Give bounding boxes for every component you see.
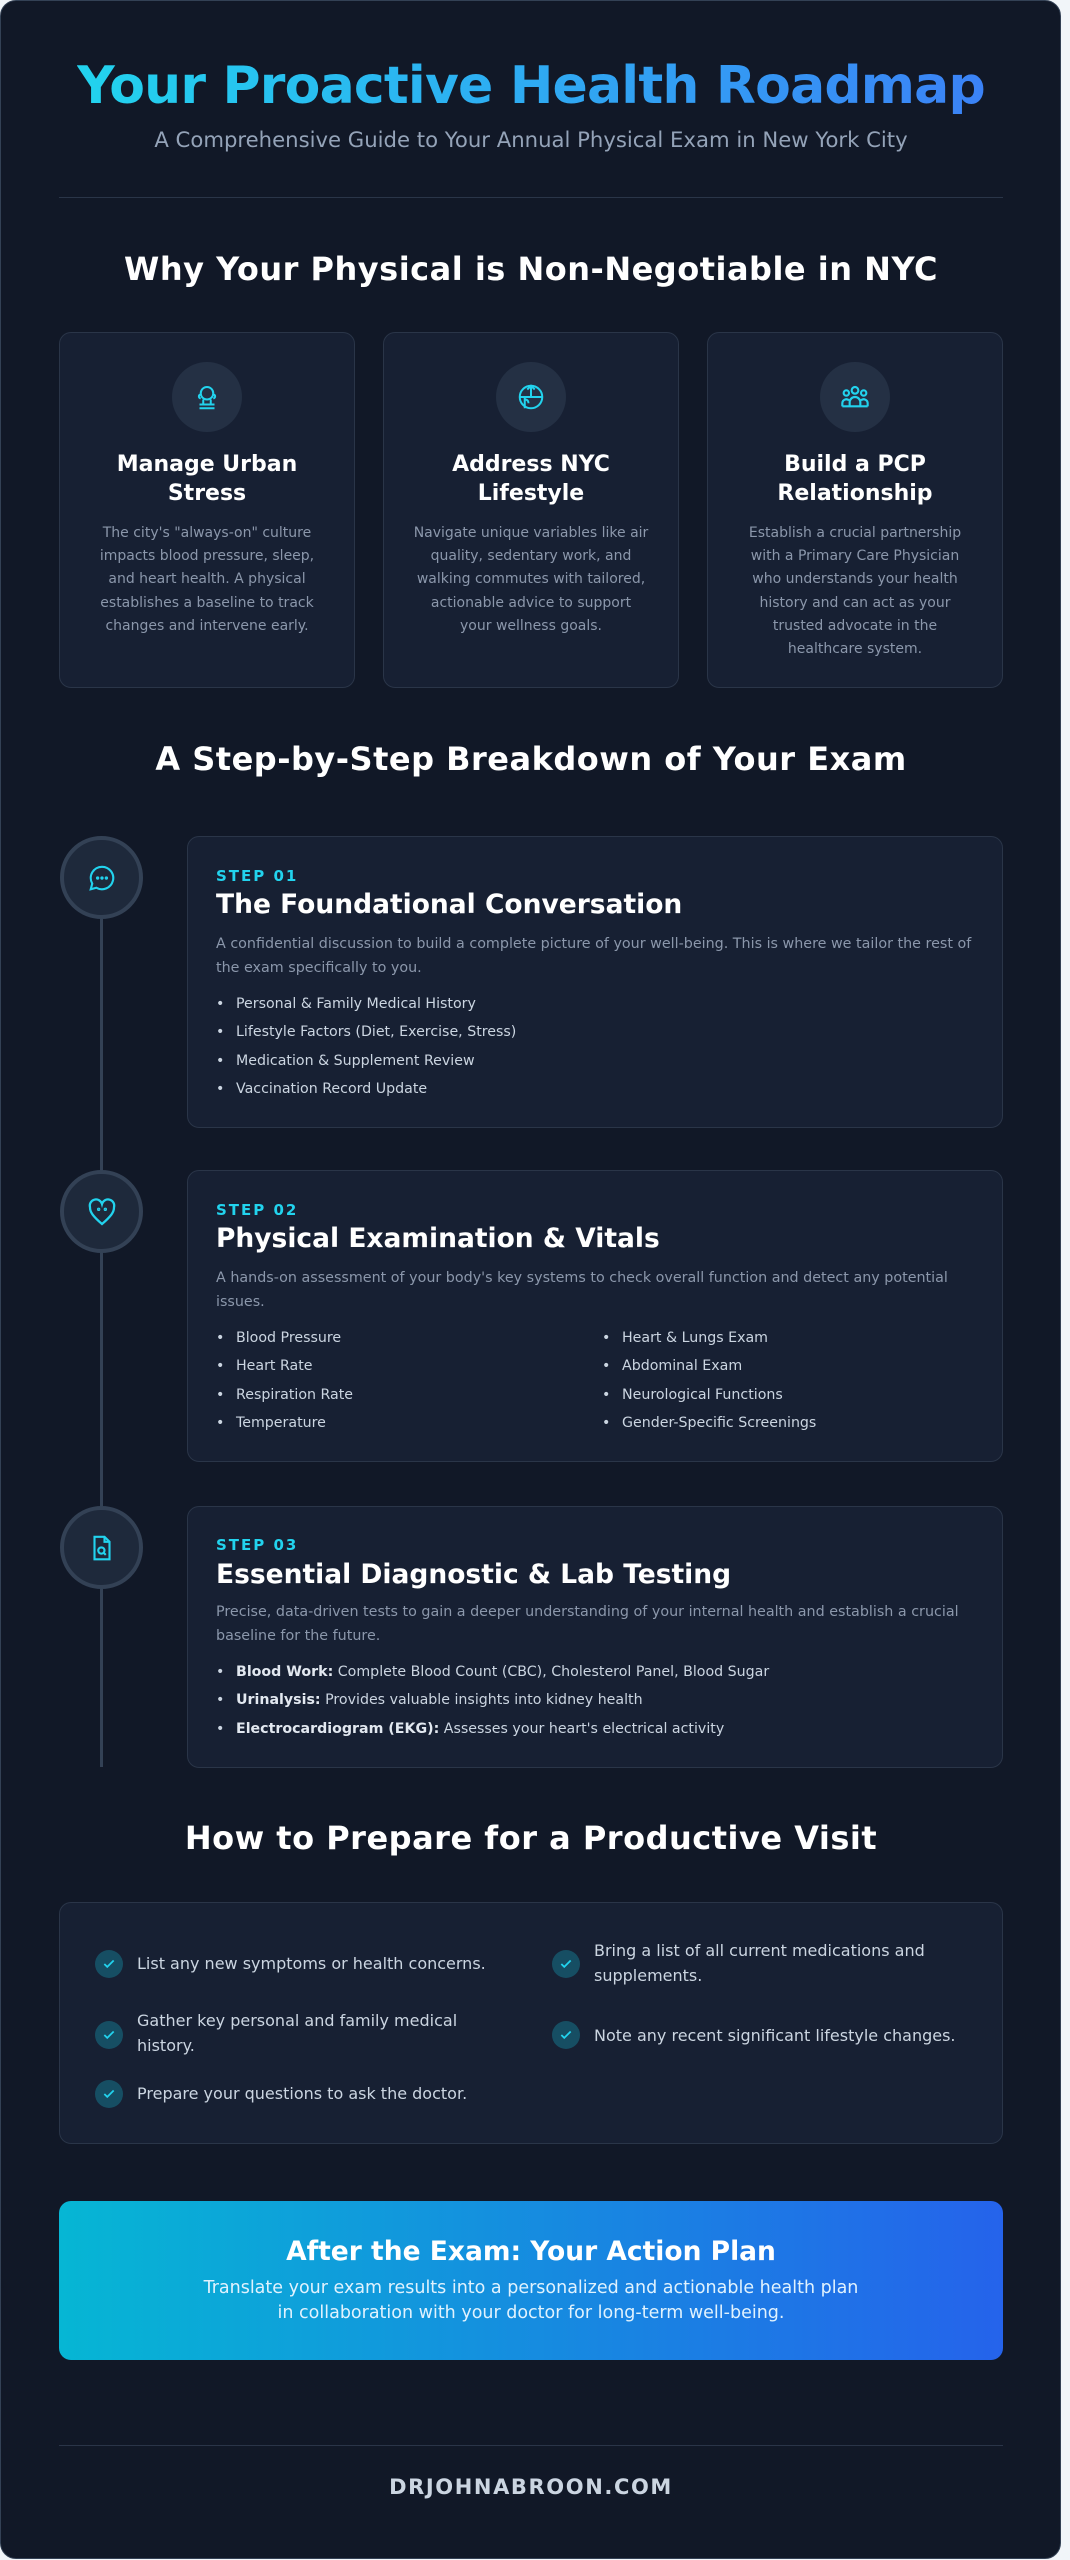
footer: DRJOHNABROON.COM — [389, 2475, 673, 2499]
heading: why: Why Your Physical is Non-Negotiable in NYC — [124, 250, 938, 288]
step 2 card: Heart Rate — [236, 1358, 313, 1374]
subtitle: A Comprehensive Guide to Your Annual Physical Exam in New York City — [154, 127, 908, 152]
step 1 card: A confidential discussion to build a complete picture of your well-being. This is where we tailor the rest of the exam specifically to you. — [216, 936, 971, 976]
timeline line — [100, 881, 103, 1767]
callout: action plan: Translate your exam results into a personalized and actionable health plan — [204, 2278, 858, 2298]
card: urban stress — [59, 332, 355, 688]
card: lifestyle: Address NYC Lifestyle — [452, 452, 610, 506]
panel: checklist — [59, 1902, 1003, 2144]
icon: group — [820, 362, 890, 432]
step 2 card: Abdominal Exam — [622, 1358, 742, 1374]
step 3 card: Blood Work: Complete Blood Count (CBC), Cholesterol Panel, Blood Sugar — [236, 1664, 769, 1680]
step 1 card — [187, 836, 1003, 1128]
item 3: Gather key personal and family medical history. — [137, 2011, 457, 2055]
card: pcp: Establish a crucial partnership with a Primary Care Physician who understands your health history and can act as your trusted advocate in the healthcare system. — [749, 525, 961, 657]
step 2 card: Heart & Lungs Exam — [622, 1330, 768, 1346]
step 3 card: Urinalysis: Provides valuable insights into kidney health — [236, 1692, 643, 1708]
callout: action plan: in collaboration with your doctor for long-term well-being. — [278, 2303, 784, 2323]
item 4 — [552, 2021, 956, 2049]
icon: person — [172, 362, 242, 432]
step 2 icon — [60, 1170, 143, 1253]
card: lifestyle: actionable advice to support — [431, 595, 631, 611]
card: pcp — [707, 332, 1003, 688]
heading: prepare: How to Prepare for a Productive Visit — [185, 1819, 877, 1857]
card: lifestyle: your wellness goals. — [460, 618, 602, 634]
step 2 card: Respiration Rate — [236, 1387, 353, 1403]
card: lifestyle: Navigate unique variables like air — [414, 525, 648, 541]
step 2 card: Gender-Specific Screenings — [622, 1415, 816, 1431]
heading: steps: A Step-by-Step Breakdown of Your Exam — [155, 740, 907, 778]
card: lifestyle: walking commutes with tailored, — [417, 571, 645, 587]
item 5: Prepare your questions to ask the doctor. — [137, 2084, 467, 2103]
step 2 card: Temperature — [236, 1415, 326, 1431]
card: lifestyle — [383, 332, 679, 688]
step 3 card: Electrocardiogram (EKG): Assesses your heart's electrical activity — [236, 1721, 724, 1737]
card: pcp: Build a PCP Relationship — [777, 452, 933, 506]
step 3 card: Precise, data-driven tests to gain a deeper understanding of your internal health and establish a crucial baseline for the future. — [216, 1604, 959, 1644]
step 1 card: Medication & Supplement Review — [236, 1053, 475, 1069]
card: urban stress: The city's "always-on" culture impacts blood pressure, sleep, and heart health. A physical establishes a baseline to track changes and intervene early. — [100, 525, 314, 634]
step 1 card: Personal & Family Medical History — [236, 996, 476, 1012]
step 1 card: The Foundational Conversation — [216, 889, 682, 920]
step 2 card: Physical Examination & Vitals — [216, 1223, 660, 1254]
step 3 card: Essential Diagnostic & Lab Testing — [216, 1559, 731, 1590]
step 2 card: STEP 02 — [216, 1201, 298, 1219]
step 3 card: STEP 03 — [216, 1536, 298, 1554]
item 1: List any new symptoms or health concerns. — [137, 1954, 486, 1973]
item 2: Bring a list of all current medications and supplements. — [594, 1941, 925, 1985]
step 1 card: Lifestyle Factors (Diet, Exercise, Stress) — [236, 1024, 516, 1040]
step 2 card — [187, 1170, 1003, 1462]
step 2 card: A hands-on assessment of your body's key systems to check overall function and detect any potential issues. — [216, 1270, 948, 1310]
step 3 card — [187, 1506, 1003, 1768]
card: urban stress: Manage Urban Stress — [117, 452, 297, 506]
step 3 icon — [60, 1506, 143, 1589]
step 1 card: STEP 01 — [216, 867, 298, 885]
card: lifestyle: quality, sedentary work, and — [431, 548, 631, 564]
callout: action plan: After the Exam: Your Action Plan — [286, 2236, 776, 2267]
icon: globe — [496, 362, 566, 432]
item 1 — [95, 1950, 486, 1978]
step 1 icon — [60, 836, 143, 919]
item 4: Note any recent significant lifestyle changes. — [594, 2026, 956, 2045]
step 1 card: Vaccination Record Update — [236, 1081, 427, 1097]
callout: action plan — [59, 2201, 1003, 2360]
step 2 card: Blood Pressure — [236, 1330, 341, 1346]
item 5 — [95, 2080, 467, 2108]
step 2 card: Neurological Functions — [622, 1387, 783, 1403]
title: Your Proactive Health Roadmap — [77, 56, 985, 116]
